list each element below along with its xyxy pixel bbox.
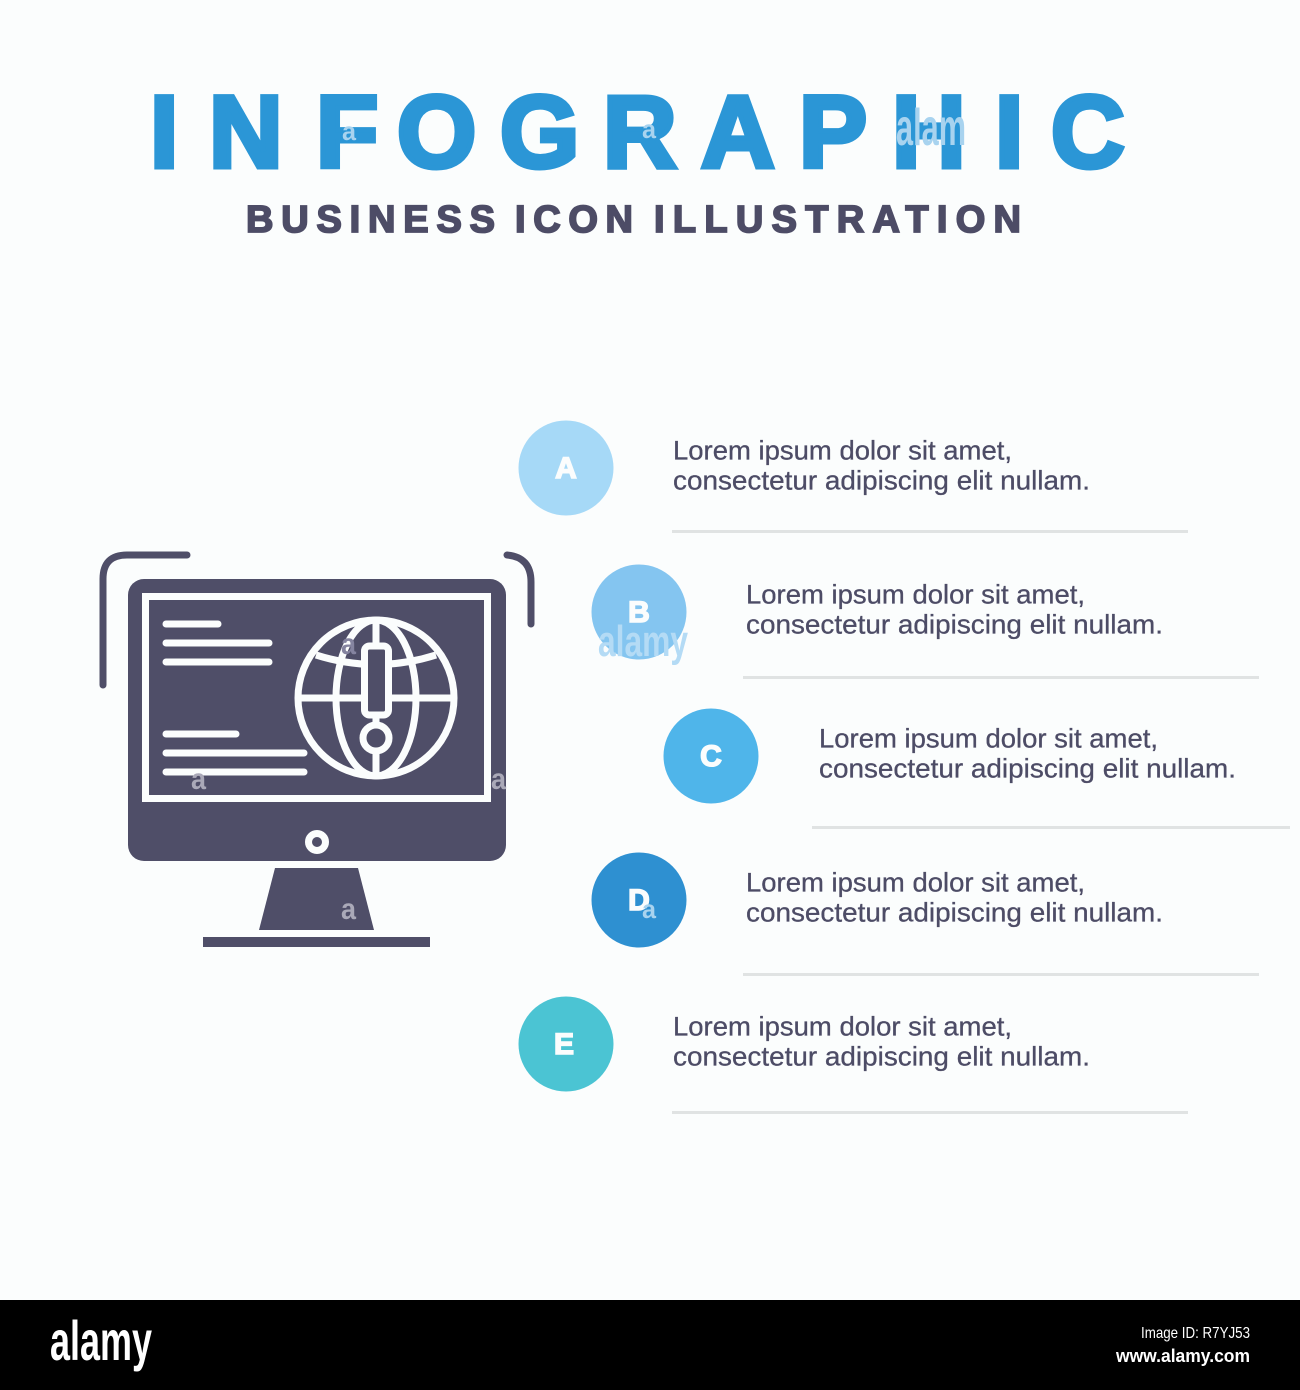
stock watermarks: a	[642, 114, 657, 144]
step C: circle badge: C	[700, 740, 722, 773]
step E: text: consectetur adipiscing elit nullam.	[673, 1042, 1090, 1072]
icon part: stand	[259, 868, 374, 930]
footer text: image id: Image ID: R7YJ53	[1141, 1325, 1250, 1342]
stock watermarks: a	[642, 894, 657, 924]
icon part: corner brackets	[103, 555, 531, 685]
step B: circle badge: B	[628, 596, 650, 629]
icon part: text lines on screen	[166, 624, 304, 772]
icon: monitor with globe and exclamation mark	[103, 555, 531, 947]
icon part: screen frame	[146, 596, 488, 798]
step D: circle badge: D	[628, 884, 650, 917]
subtitle: business icon illustration: ICON	[515, 199, 633, 241]
step D: text: consectetur adipiscing elit nullam.	[746, 898, 1163, 928]
footer bar	[0, 1300, 1300, 1390]
icon part: power button	[308, 834, 326, 850]
footer text: website: www.alamy.com	[1115, 1346, 1250, 1366]
step E: text: Lorem ipsum dolor sit amet,	[673, 1012, 1012, 1042]
stock watermarks: a	[191, 763, 206, 796]
step E: circle badge: E	[554, 1028, 574, 1061]
step C: text: consectetur adipiscing elit nullam.	[819, 754, 1236, 784]
step A: circle badge: A	[555, 452, 577, 485]
stock watermarks: a	[491, 763, 506, 796]
stock watermarks: alam	[896, 99, 966, 157]
title: INFOGRAPHIC: INFOGRAPHIC	[150, 75, 1125, 189]
step C: circle badge	[664, 708, 758, 804]
step D: circle badge	[592, 852, 686, 948]
step B: circle badge	[592, 564, 686, 660]
footer logo: alamy: alamy	[50, 1309, 152, 1372]
step A: circle badge	[518, 420, 614, 516]
icon part: base	[203, 937, 430, 947]
stock watermarks: a	[341, 628, 356, 661]
stock watermarks	[191, 99, 966, 926]
step C: text: Lorem ipsum dolor sit amet,	[819, 724, 1158, 754]
icon part: globe	[298, 620, 454, 776]
stock watermarks: alamy	[598, 617, 688, 666]
step E: circle badge	[518, 996, 614, 1092]
subtitle: business icon illustration: BUSINESS	[246, 199, 495, 241]
step B: text: consectetur adipiscing elit nullam.	[746, 610, 1163, 640]
stock watermarks: a	[342, 116, 357, 146]
step B: text: Lorem ipsum dolor sit amet,	[746, 580, 1085, 610]
step A: text: consectetur adipiscing elit nullam.	[673, 466, 1090, 496]
step A: text: Lorem ipsum dolor sit amet,	[673, 436, 1012, 466]
step D: text: Lorem ipsum dolor sit amet,	[746, 868, 1085, 898]
icon part: exclamation mark	[363, 646, 389, 751]
stock watermarks: a	[341, 893, 356, 926]
subtitle: business icon illustration: ILLUSTRATION	[654, 199, 1021, 241]
icon part: monitor body	[128, 579, 506, 861]
